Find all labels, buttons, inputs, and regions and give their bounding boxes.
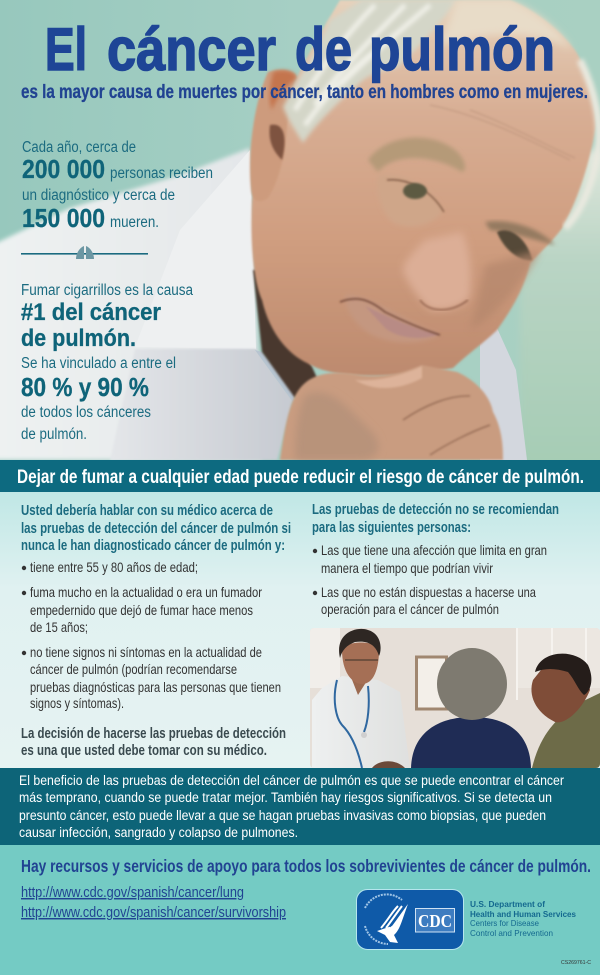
icon-free hair mass (283, 0, 457, 143)
statistic: annual diagnoses and deaths: 200 000 (22, 154, 105, 184)
title: pulmón (369, 16, 555, 83)
heading: not recommended (312, 502, 559, 536)
hero photo: older man resting chin on hands (0, 0, 600, 470)
exclusion list: Las que tiene una afección que limita en gran (321, 542, 547, 558)
department attribution: Health and Human Services (470, 909, 576, 919)
decision note: es una que usted debe tomar con su médico. (21, 743, 267, 759)
statistic: smoking as leading cause: 80 % y 90 % (21, 372, 149, 402)
statistic: annual diagnoses and deaths: 150 000 (22, 203, 105, 233)
panel: benefits and risks (0, 768, 600, 845)
criteria list: empedernido que dejó de fumar hace menos (30, 602, 253, 618)
criteria list: signos y síntomas). (30, 695, 124, 711)
heading: talk to your doctor: nunca le han diagnosticado cáncer de pulmón y: (21, 538, 285, 554)
heading: talk to your doctor: las pruebas de detección del cáncer de pulmón si (21, 521, 291, 537)
heading: talk to your doctor (21, 503, 291, 554)
exclusion list: operación para el cáncer de pulmón (321, 601, 499, 617)
statistic: annual diagnoses and deaths: mueren. (110, 214, 159, 231)
department attribution: Centers for Disease (470, 918, 539, 928)
title (45, 16, 555, 83)
statistic: smoking as leading cause: de pulmón. (21, 426, 87, 443)
resource links (21, 885, 286, 921)
criteria list: no tiene signos ni síntomas en la actualidad de (30, 644, 262, 660)
statistic: smoking as leading cause: de todos los cánceres (21, 404, 151, 421)
title: El (45, 16, 87, 83)
exclusion list (313, 542, 547, 617)
statistic: smoking as leading cause: Fumar cigarrillos es la causa (21, 282, 193, 299)
criteria list: cáncer de pulmón (podrían recomendarse (30, 661, 237, 677)
statistic: annual diagnoses and deaths: personas reciben (110, 165, 213, 182)
document code: CS269761-C (561, 960, 591, 966)
statistic: annual diagnoses and deaths: un diagnóstico y cerca de (22, 187, 175, 204)
CDC logo (356, 890, 464, 950)
resource links: http://www.cdc.gov/spanish/cancer/lung (21, 885, 244, 901)
lower content background (0, 490, 600, 770)
footer background (0, 845, 600, 975)
divider with lung icon (21, 246, 148, 259)
panel: who is not recommended for screening (312, 502, 559, 617)
statistic: smoking as leading cause: Se ha vinculado a entre el (21, 355, 176, 372)
statistic: smoking as leading cause: #1 del cáncer (21, 299, 161, 326)
title: de (295, 16, 352, 83)
criteria list: fuma mucho en la actualidad o era un fumador (30, 584, 262, 600)
icon: HHS eagle seal (365, 894, 408, 944)
statistic: annual diagnoses and deaths (22, 139, 213, 233)
exclusion list: manera el tiempo que podrían vivir (321, 560, 493, 576)
decision note (21, 726, 286, 759)
department attribution (470, 899, 576, 938)
photo: doctor talking with couple (310, 628, 600, 768)
title: cáncer (107, 16, 276, 83)
criteria list: tiene entre 55 y 80 años de edad; (30, 559, 198, 575)
statistic: annual diagnoses and deaths: Cada año, cerca de (22, 139, 136, 156)
panel: benefits and risks: causar infección, sangrado y colapso de pulmones. (19, 825, 298, 841)
department attribution: Control and Prevention (470, 928, 553, 938)
resource links: http://www.cdc.gov/spanish/cancer/survivorship (21, 905, 286, 921)
criteria list: de 15 años; (30, 619, 88, 635)
criteria list: pruebas diagnósticas para las personas que tienen (30, 679, 281, 695)
heading: talk to your doctor: Usted debería hablar con su médico acerca de (21, 503, 273, 519)
department attribution: U.S. Department of (470, 899, 545, 909)
statistic: smoking as leading cause (21, 282, 193, 443)
statistic: smoking as leading cause: de pulmón. (21, 325, 136, 352)
criteria list (22, 559, 281, 711)
CDC wordmark: CDC (418, 911, 452, 931)
heading: not recommended: para las siguientes personas: (312, 520, 471, 536)
decision note: La decisión de hacerse las pruebas de detección (21, 726, 286, 742)
panel: who should talk to a doctor (21, 503, 291, 759)
banner: quitting smoking (0, 460, 600, 492)
exclusion list: Las que no están dispuestas a hacerse una (321, 584, 536, 600)
